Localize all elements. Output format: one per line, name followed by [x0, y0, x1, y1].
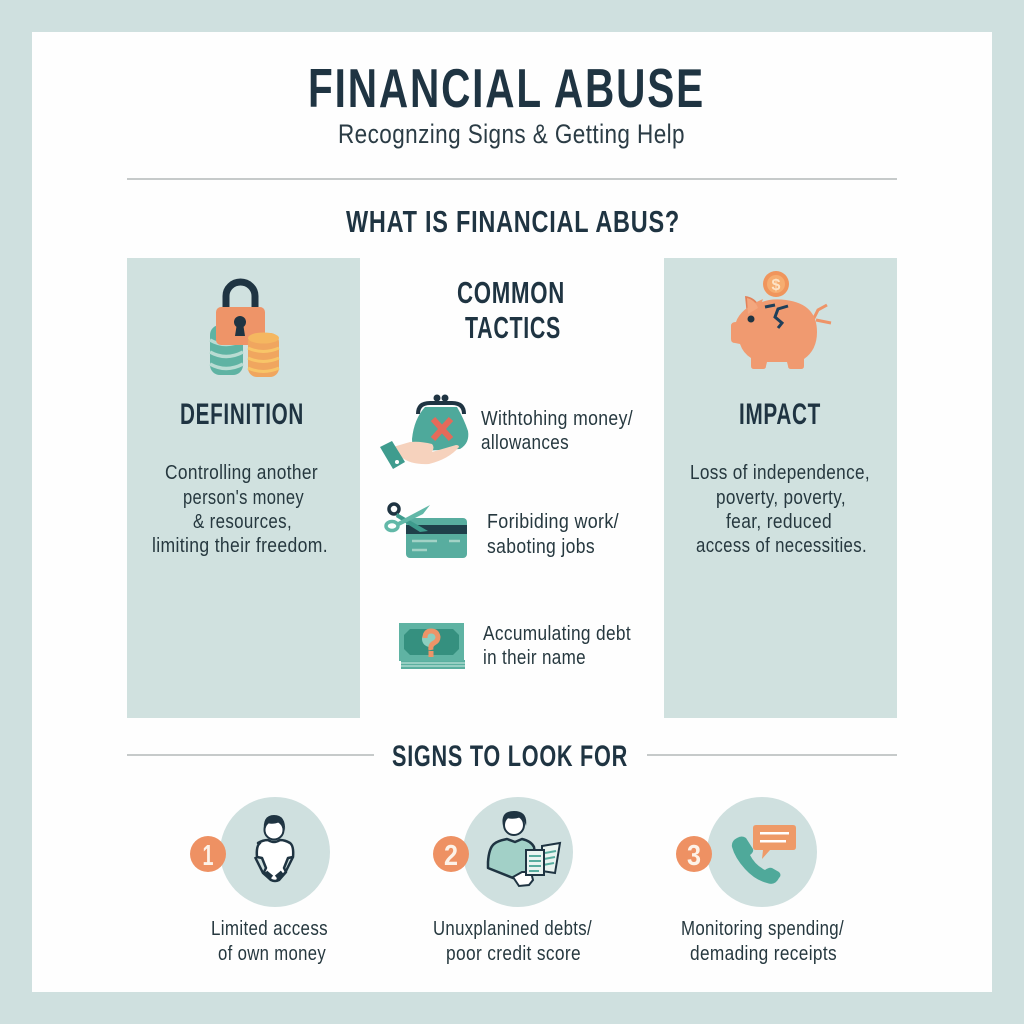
title: FINANCIAL ABUSE: [308, 57, 705, 119]
icon: purse held in hand with red cross: [380, 394, 468, 469]
heading: impact: IMPACT: [739, 398, 821, 431]
heading: common tactics: TACTICS: [465, 310, 561, 345]
text: impact body: access of necessities.: [696, 535, 867, 557]
icon: broken piggy bank with coin: [731, 271, 831, 369]
heading: definition: DEFINITION: [180, 398, 304, 431]
subtitle: Recognzing Signs & Getting Help: [338, 119, 685, 149]
text: impact body: fear, reduced: [726, 511, 832, 533]
text: tactic 3: in their name: [483, 647, 586, 669]
text: impact body: [690, 462, 870, 557]
badge: number 3: [676, 836, 712, 872]
sign 3: monitoring spending: [676, 797, 844, 965]
icon: person with bound hands: [255, 815, 293, 881]
text: sign 3: [681, 918, 844, 965]
icon: padlock and coins: [210, 282, 279, 377]
panel: definition: [127, 258, 360, 718]
text: definition body: & resources,: [193, 511, 292, 533]
icon: banknotes with question mark: [399, 623, 465, 669]
text: tactic 2: Foribiding work/: [487, 511, 619, 533]
heading: what is financial abuse: WHAT IS FINANCIAL ABUS?: [346, 204, 680, 239]
text: impact body: poverty, poverty,: [716, 487, 846, 509]
text: sign 1: Limited access: [211, 918, 328, 940]
text: definition body: Controlling another: [165, 462, 318, 484]
text: definition body: [152, 462, 328, 557]
panel: common tactics: [380, 275, 633, 669]
text: sign 2: poor credit score: [446, 943, 581, 965]
text: sign 1: of own money: [218, 943, 326, 965]
text: sign 2: Unuxplanined debts/: [433, 918, 592, 940]
text: sign 3: demading receipts: [690, 943, 837, 965]
heading: common tactics: COMMON: [457, 275, 565, 310]
icon: broken piggy bank with coin: $: [772, 277, 781, 294]
text: tactic 1: [481, 408, 633, 454]
text: tactic 1: Withtohing money/: [481, 408, 633, 430]
text: tactic 2: saboting jobs: [487, 536, 595, 558]
text: sign 2: [433, 918, 592, 965]
icon: phone with speech bubble: [732, 825, 796, 884]
sign 1: limited access: [190, 797, 330, 965]
badge: number 1: 1: [202, 840, 214, 872]
heading: signs to look for: SIGNS TO LOOK FOR: [392, 740, 628, 773]
badge: number 3: 3: [687, 840, 701, 872]
text: sign 1: [211, 918, 328, 965]
badge: number 1: [190, 836, 226, 872]
text: definition body: limiting their freedom.: [152, 535, 328, 557]
panel: impact: [664, 258, 897, 718]
text: tactic 3: [483, 623, 631, 669]
text: definition body: person's money: [183, 487, 304, 509]
icon: scissors cutting card: [386, 504, 467, 558]
text: tactic 1: allowances: [481, 432, 569, 454]
text: tactic 3: Accumulating debt: [483, 623, 631, 645]
heading: common tactics: [457, 275, 565, 345]
text: impact body: Loss of independence,: [690, 462, 870, 484]
badge: number 2: [433, 836, 469, 872]
icon: person holding documents: [488, 811, 560, 886]
badge: number 2: 2: [444, 840, 458, 872]
text: sign 3: Monitoring spending/: [681, 918, 844, 940]
sign 2: unexplained debts: [433, 797, 592, 965]
text: tactic 2: [487, 511, 619, 558]
